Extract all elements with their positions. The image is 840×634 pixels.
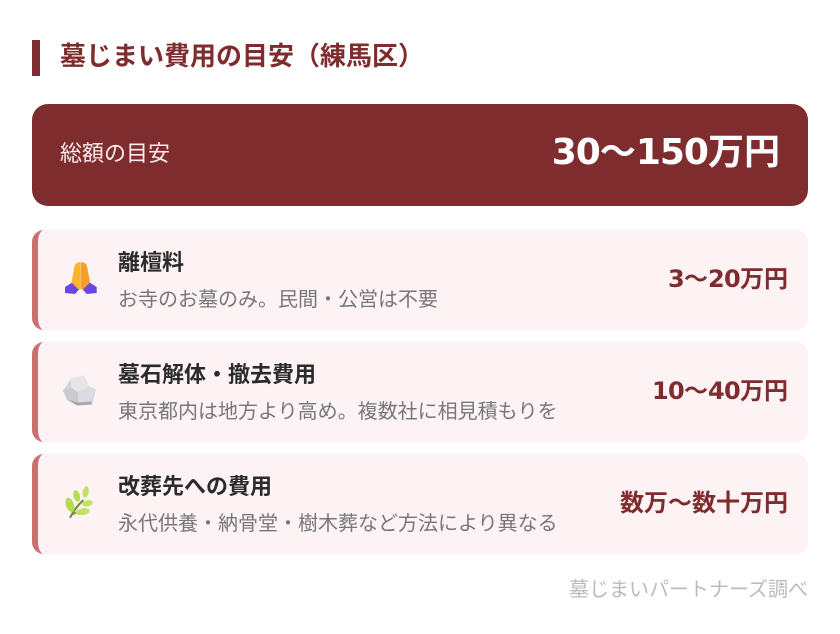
heading accent bar: [32, 40, 40, 76]
item name: 墓石解体・撤去費用: [118, 357, 316, 389]
item price: 数万〜数十万円: [620, 489, 788, 517]
item name: 改葬先への費用: [118, 469, 272, 501]
item description: お寺のお墓のみ。民間・公営は不要: [118, 283, 438, 312]
source note: 墓じまいパートナーズ調べ: [569, 573, 808, 602]
icon: herb sprig: [65, 486, 93, 518]
item price: 10〜40万円: [652, 377, 788, 405]
icon: rock: [63, 376, 96, 406]
panel: temple leaving fee: [32, 230, 808, 330]
heading text: 墓じまい費用の目安（練馬区）: [60, 36, 424, 73]
item price: 3〜20万円: [668, 265, 788, 293]
heading: [32, 36, 424, 76]
icon: praying hands: [65, 262, 97, 294]
item description: 東京都内は地方より高め。複数社に相見積もりを: [118, 395, 558, 424]
panel: gravestone removal cost: [32, 342, 808, 442]
total label: 総額の目安: [60, 136, 170, 168]
item description: 永代供養・納骨堂・樹木葬など方法により異なる: [118, 507, 558, 536]
item name: 離檀料: [118, 245, 184, 277]
total amount: 30〜150万円: [552, 132, 780, 173]
panel: total estimate: [32, 104, 808, 206]
panel: new resting place cost: [32, 454, 808, 554]
